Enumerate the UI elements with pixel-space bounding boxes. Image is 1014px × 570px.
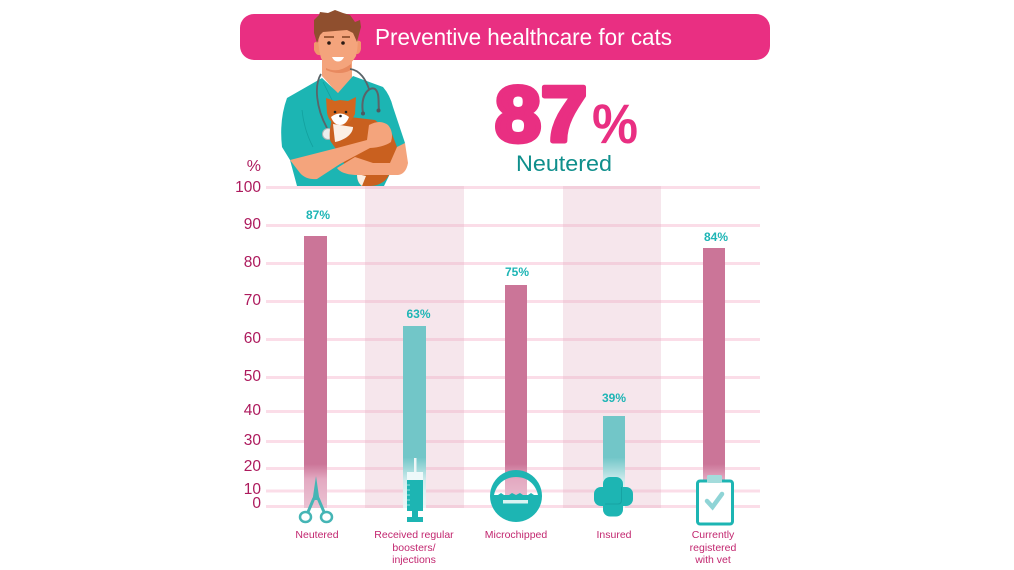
stethoscope tube bbox=[317, 69, 369, 128]
bar: Microchipped 75%: 75% bbox=[505, 265, 529, 279]
category labels: with vet bbox=[694, 554, 731, 566]
category labels: injections bbox=[392, 554, 436, 566]
left arm bbox=[290, 122, 392, 179]
y axis labels: 50 bbox=[244, 368, 261, 385]
bar: Microchipped 75% bbox=[505, 265, 529, 508]
cat chest bbox=[333, 124, 353, 142]
face bbox=[318, 30, 358, 70]
icon: surgical scissors bbox=[300, 476, 332, 522]
category labels: Received regular bbox=[374, 529, 454, 541]
y axis labels: 30 bbox=[244, 432, 261, 449]
y axis labels: % bbox=[247, 158, 261, 175]
neck opening bbox=[322, 62, 352, 93]
y axis labels: 10 bbox=[244, 481, 261, 498]
headline stat bbox=[495, 70, 638, 176]
bar: Received regular boosters/injections 63% bbox=[403, 307, 431, 508]
category labels: Neutered bbox=[295, 529, 339, 541]
headline stat: 87 bbox=[495, 70, 587, 158]
category labels: Insured bbox=[596, 529, 632, 541]
y axis labels: 100 bbox=[235, 179, 261, 196]
cat head bbox=[326, 97, 356, 125]
scrubs top bbox=[281, 76, 405, 186]
y axis labels: 90 bbox=[244, 216, 261, 233]
y axis labels: 80 bbox=[244, 254, 261, 271]
eyes, brows and smile bbox=[327, 41, 331, 45]
y axis labels bbox=[235, 158, 261, 512]
category labels: boosters/ bbox=[392, 542, 436, 554]
category labels: Currently bbox=[692, 529, 735, 541]
y axis labels: 0 bbox=[252, 495, 261, 512]
bar: Insured 39% bbox=[602, 391, 626, 508]
bar: Neutered 87% bbox=[304, 208, 330, 508]
headline stat: Neutered bbox=[516, 151, 612, 176]
title banner: Preventive healthcare for cats bbox=[375, 24, 672, 50]
y axis labels: 60 bbox=[244, 330, 261, 347]
bar: Received regular boosters/injections 63%: 63% bbox=[406, 307, 431, 321]
category labels: registered bbox=[690, 542, 736, 554]
icon: clipboard with tick bbox=[698, 475, 732, 524]
category labels: Microchipped bbox=[485, 529, 547, 541]
y axis labels: 20 bbox=[244, 458, 261, 475]
ears bbox=[314, 41, 361, 55]
bar: Currently registered with vet 84%: 84% bbox=[704, 230, 728, 244]
bar: Insured 39%: 39% bbox=[602, 391, 626, 405]
cat tail bbox=[357, 172, 390, 186]
cat body bbox=[330, 115, 397, 168]
neck bbox=[322, 55, 352, 94]
icon: syringe bbox=[407, 458, 423, 522]
hair bbox=[314, 10, 361, 43]
bar: Neutered 87%: 87% bbox=[306, 208, 330, 222]
category labels bbox=[295, 529, 736, 566]
y axis labels: 40 bbox=[244, 402, 261, 419]
right forearm bbox=[337, 143, 408, 175]
bar: Currently registered with vet 84% bbox=[703, 230, 728, 508]
sleeve seam bbox=[302, 82, 337, 147]
y axis labels: 70 bbox=[244, 292, 261, 309]
headline stat: % bbox=[592, 92, 638, 155]
icon: microchip scanner bbox=[490, 470, 542, 522]
illustration: vet holding cat bbox=[281, 10, 408, 186]
icon: plaster cross bbox=[594, 477, 633, 516]
chart background bands bbox=[365, 187, 661, 508]
title banner bbox=[240, 14, 770, 60]
stethoscope earpiece bbox=[362, 88, 379, 113]
